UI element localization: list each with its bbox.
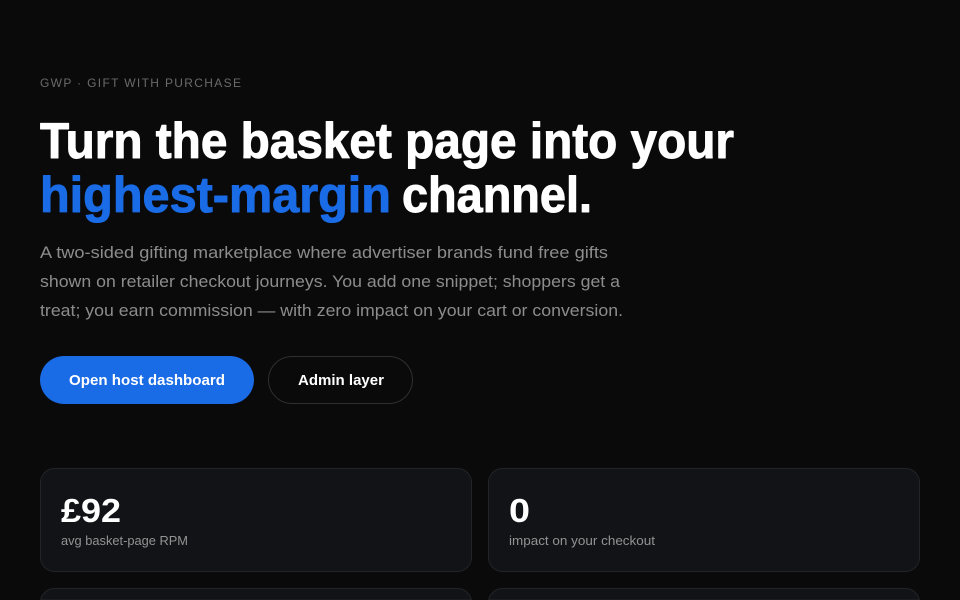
button: open host dashboard: Open host dashboard bbox=[69, 372, 225, 389]
intro paragraph bbox=[40, 243, 623, 320]
intro paragraph: shown on retailer checkout journeys. You add one snippet; shoppers get a bbox=[40, 272, 621, 291]
headline bbox=[40, 113, 734, 223]
stat card: checkout impact: impact on your checkout bbox=[509, 533, 655, 548]
intro paragraph: A two-sided gifting marketplace where advertiser brands fund free gifts bbox=[40, 243, 608, 262]
stat card: fourth, cropped at fold bbox=[488, 588, 920, 600]
button: admin layer: Admin layer bbox=[298, 372, 384, 389]
headline: highest-margin bbox=[40, 167, 391, 223]
stat card: checkout impact bbox=[488, 468, 920, 572]
stat card: basket-page RPM: avg basket-page RPM bbox=[61, 533, 188, 548]
intro paragraph: treat; you earn commission — with zero impact on your cart or conversion. bbox=[40, 301, 623, 320]
stat card: basket-page RPM: £92 bbox=[61, 492, 121, 529]
stat card: checkout impact: 0 bbox=[509, 492, 530, 529]
headline: channel. bbox=[402, 167, 592, 223]
headline: Turn the basket page into your bbox=[40, 113, 734, 169]
stat card: basket-page RPM bbox=[40, 468, 472, 572]
button: open host dashboard bbox=[40, 356, 254, 404]
eyebrow label: GWP · GIFT WITH PURCHASE bbox=[40, 76, 241, 90]
stat card: third, cropped at fold bbox=[40, 588, 472, 600]
button: admin layer bbox=[268, 356, 412, 404]
